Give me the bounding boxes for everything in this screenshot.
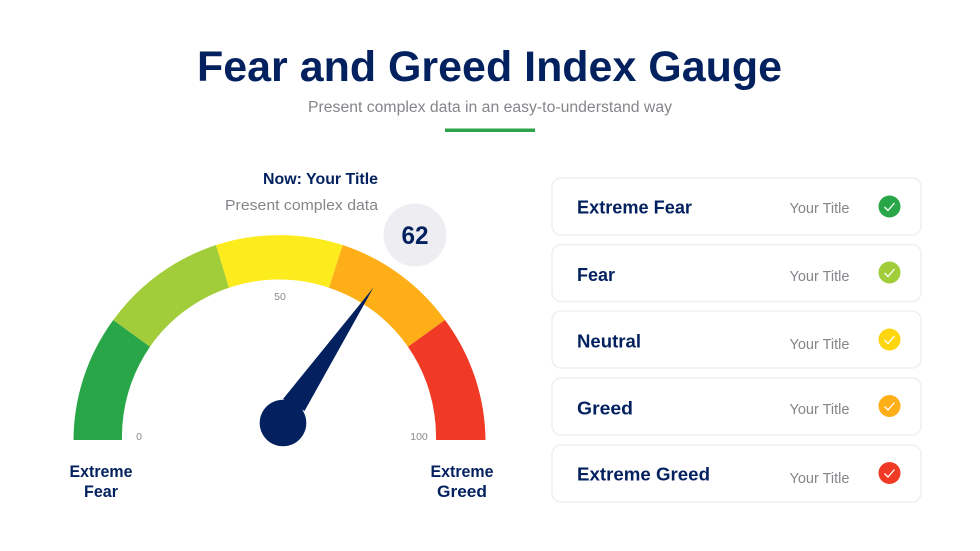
now description: Present complex data [225,197,379,214]
row label: Neutral [577,330,641,352]
panel: neutral row [552,311,921,368]
now title: Now: Your Title [263,171,378,188]
label: extreme fear [70,463,132,501]
label: extreme greed [430,463,494,501]
panel: extreme fear row [552,178,921,235]
gauge segment: neutral [216,235,343,288]
value badge [384,204,446,266]
row value: Your Title [790,401,850,418]
scale label 0: 0 [136,431,142,443]
scale label 100: 100 [410,431,428,443]
gauge segment: extreme fear [74,320,150,440]
needle [260,288,374,446]
row label: Fear [577,264,615,285]
row value: Your Title [790,470,850,487]
icon: orange check [878,395,900,417]
row value: Your Title [790,200,850,217]
accent underline [445,128,535,132]
row value: Your Title [790,268,850,285]
gauge segment: greed [329,245,445,347]
row label: Extreme Greed [577,464,710,484]
gauge chart [74,235,486,446]
title: Fear and Greed Index Gauge [197,43,782,91]
subtitle: Present complex data in an easy-to-understand way [308,99,672,116]
value badge: 62 [402,222,428,250]
scale label 50: 50 [274,291,286,303]
gauge segment: fear [113,245,229,347]
panel: extreme greed row [552,445,921,502]
row label: Greed [577,398,633,418]
label: extreme greed: Extreme [430,463,494,481]
label: extreme fear: Extreme [70,463,132,481]
label: extreme greed: Greed [437,483,487,501]
panel: greed row [552,378,921,435]
label: extreme fear: Fear [84,483,119,501]
icon: red check [878,462,900,484]
icon: yellow check [878,328,900,350]
row value: Your Title [790,336,850,353]
row label: Extreme Fear [577,196,692,218]
panel: fear row [552,244,921,302]
icon: green check [878,196,900,218]
gauge segment: extreme greed [408,320,486,440]
icon: light green check [878,262,900,284]
